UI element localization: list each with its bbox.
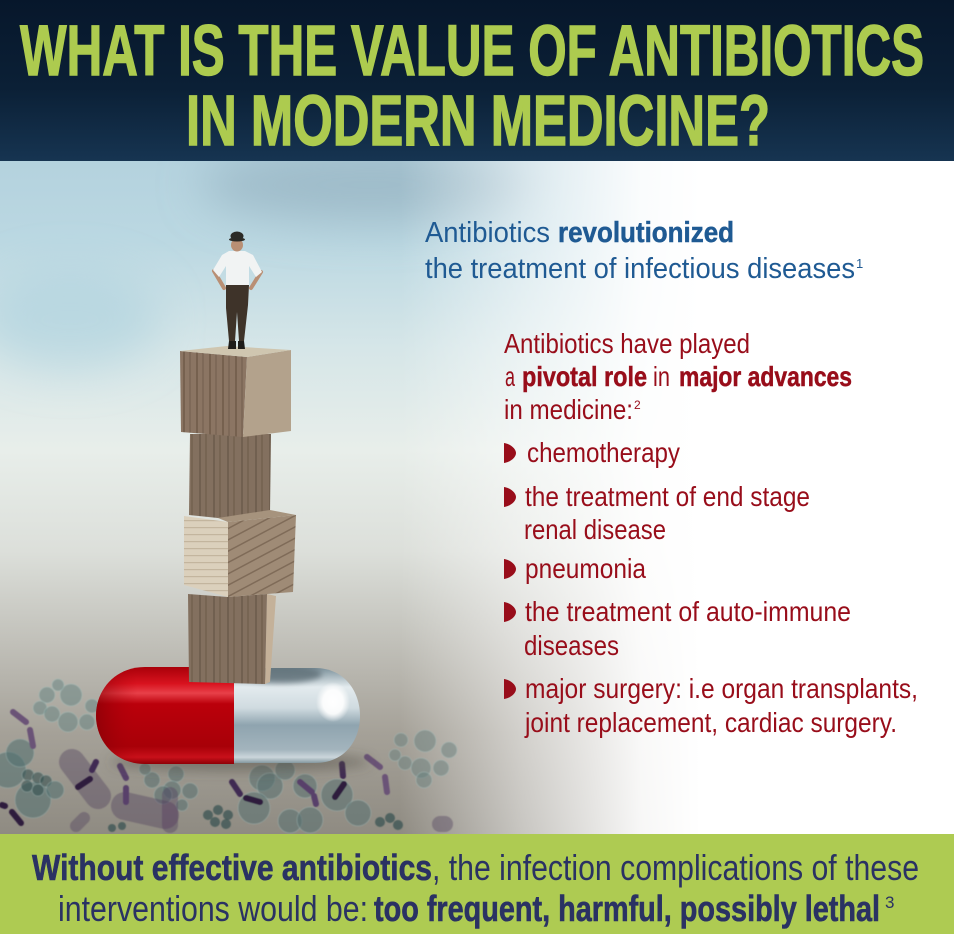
block 1 — [180, 346, 291, 437]
capsule: silver half — [234, 665, 360, 763]
bacteria cluster: lower centre — [238, 760, 371, 833]
text block: antibiotics revolutionized: revolutionized — [558, 217, 734, 249]
list item: pneumonia: pneumonia — [525, 553, 647, 584]
man: left forearm — [214, 271, 224, 288]
bacteria cluster: upper left — [33, 679, 99, 732]
bacteria cluster: below pill centre — [139, 763, 198, 811]
bacteria cluster: bottom small — [108, 805, 403, 832]
list item: chemotherapy: chemotherapy — [527, 437, 680, 468]
text block: pivotal role intro: in — [653, 361, 670, 392]
list: medical advances — [504, 437, 918, 738]
footer text: 3 — [885, 893, 894, 912]
text block: pivotal role intro: major advances — [679, 361, 852, 392]
footer text — [32, 847, 919, 929]
header band — [0, 0, 954, 161]
list item: major surgery: joint replacement, cardiac surgery. — [524, 707, 897, 738]
man: hat — [229, 232, 245, 242]
bacteria cluster: lower left — [0, 739, 64, 818]
text block: pivotal role intro: in medicine: — [504, 394, 633, 425]
text block: pivotal role intro: 2 — [634, 398, 641, 412]
list item: auto-immune diseases — [504, 596, 851, 661]
man: shirt and arms — [213, 251, 262, 285]
man: face — [231, 238, 243, 252]
text block: pivotal role intro — [504, 328, 852, 425]
block 4 — [188, 594, 276, 684]
list item: auto-immune diseases: diseases — [524, 630, 619, 661]
small dark bacteria rods — [2, 712, 387, 823]
man: trousers — [226, 285, 249, 341]
text block: antibiotics revolutionized — [425, 217, 863, 285]
block 3 — [184, 510, 296, 597]
illustration: bacteria on the ground — [0, 679, 457, 833]
photo background: sky and ground fading to white — [0, 147, 701, 834]
man: right forearm — [251, 272, 261, 288]
large faded bacteria rods — [72, 762, 445, 826]
footer band — [0, 834, 954, 934]
bacteria cluster: right of pill — [389, 730, 457, 788]
title — [20, 12, 924, 161]
text block: pivotal role intro: pivotal role — [522, 361, 647, 392]
text block: antibiotics revolutionized: 1 — [856, 256, 863, 271]
text block: pivotal role intro: a — [505, 361, 515, 392]
list item: end stage renal disease: the treatment of end stage — [525, 481, 810, 512]
man: shoes — [228, 341, 245, 349]
illustration: red and silver capsule — [96, 665, 360, 764]
capsule: red half — [96, 667, 234, 764]
text block: pivotal role intro: Antibiotics have played — [504, 328, 750, 359]
illustration: pill shadow — [110, 753, 370, 771]
list item: end stage renal disease — [504, 481, 810, 545]
list item: auto-immune diseases: the treatment of auto-immune — [525, 596, 851, 627]
footer text: Without effective antibiotics — [32, 847, 432, 888]
block 2 — [189, 434, 271, 518]
illustration: stacked wooden blocks — [180, 346, 296, 684]
text block: antibiotics revolutionized: the treatment of infectious diseases — [425, 253, 855, 285]
list item: end stage renal disease: renal disease — [524, 514, 666, 545]
list item: major surgery: major surgery: i.e organ transplants, — [525, 673, 918, 704]
list item: major surgery — [504, 673, 918, 738]
illustration: man standing on the blocks — [213, 232, 262, 349]
footer text: interventions would be: — [58, 888, 368, 929]
text block: antibiotics revolutionized: Antibiotics — [425, 217, 550, 249]
